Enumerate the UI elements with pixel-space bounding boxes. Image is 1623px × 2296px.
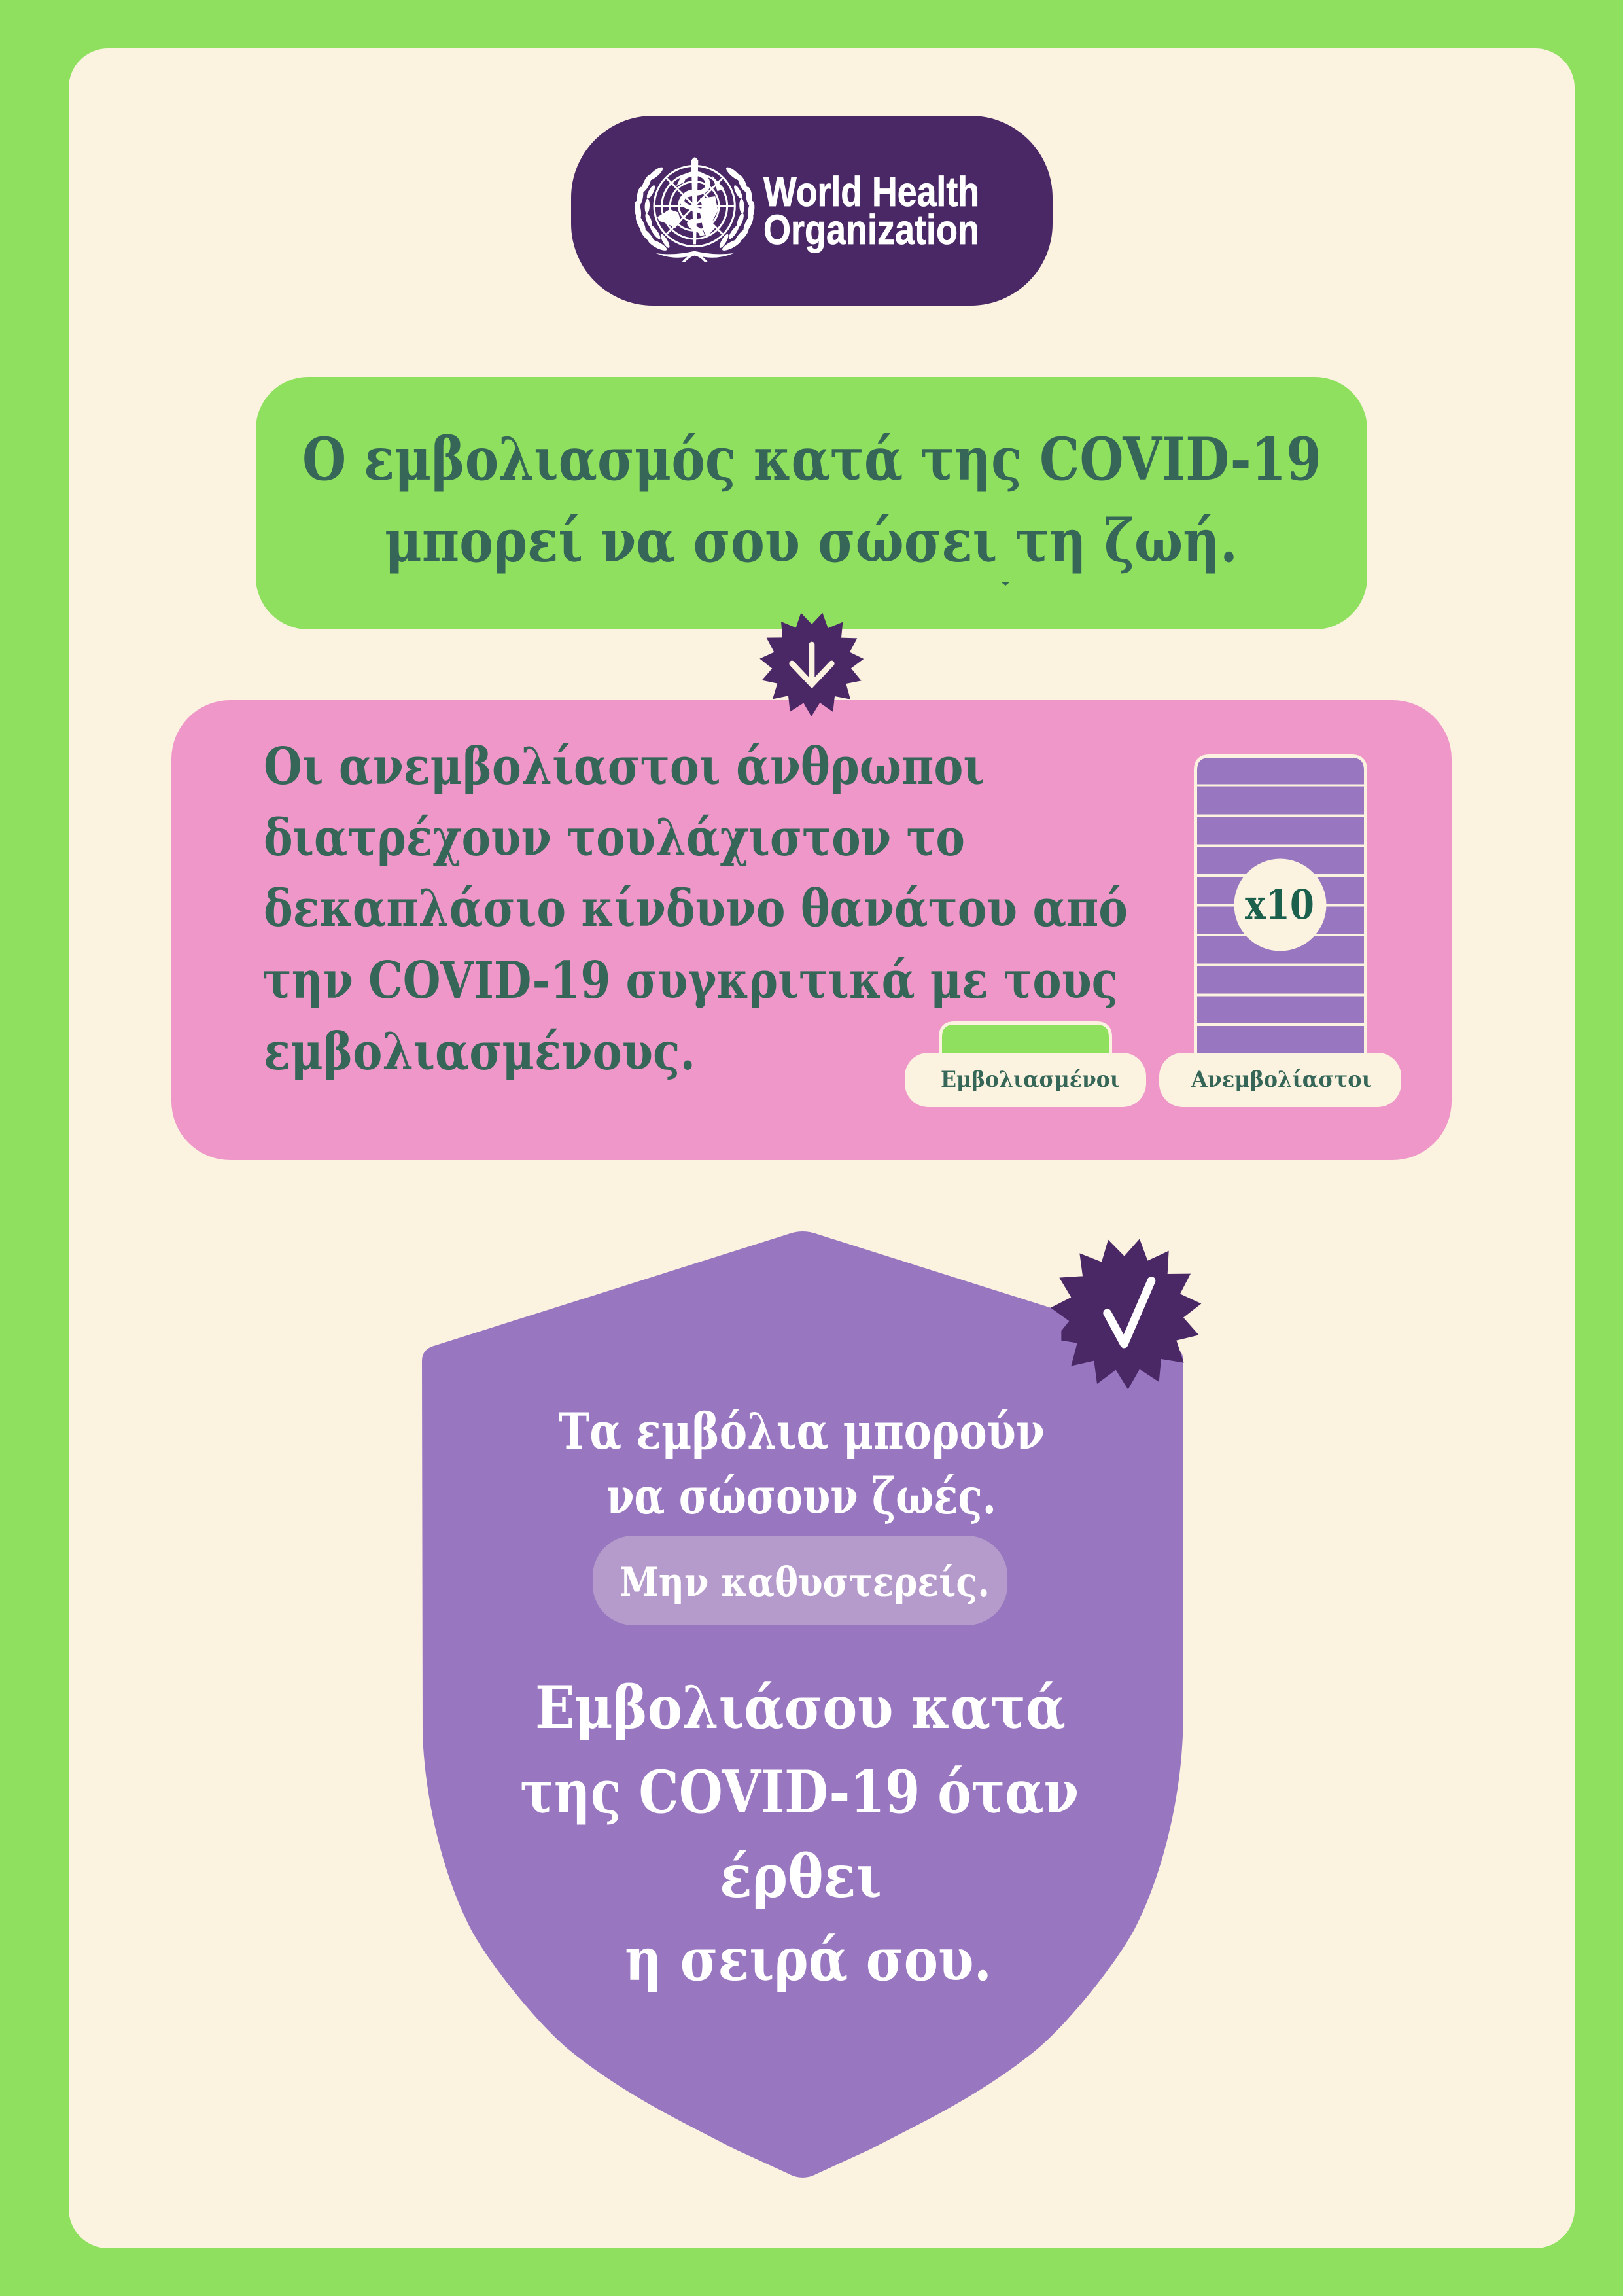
risk text: εμβολιασμένους. bbox=[264, 1022, 695, 1082]
label: unvaccinated: Ανεμβολίαστοι bbox=[1191, 1067, 1372, 1093]
text: vaccines save lives: να σώσουν ζωές. bbox=[606, 1467, 996, 1525]
text: get vaccinated bbox=[520, 1673, 1079, 1994]
icon: down arrow badge bbox=[759, 613, 864, 716]
risk text: Οι ανεμβολίαστοι άνθρωποι bbox=[264, 737, 985, 796]
panel: pink risk comparison bbox=[171, 700, 1452, 1160]
panel: green headline bbox=[256, 377, 1367, 629]
callout: do not delay bbox=[593, 1536, 1007, 1625]
risk text: διατρέχουν τουλάχιστον το bbox=[264, 808, 965, 868]
text: get vaccinated: έρθει bbox=[720, 1842, 882, 1911]
x10 badge: x10 bbox=[1245, 881, 1314, 928]
logo wordmark: World Health bbox=[763, 168, 979, 215]
WHO logo pill bbox=[571, 116, 1053, 306]
icon: WHO emblem bbox=[633, 157, 756, 262]
callout: do not delay: Μην καθυστερείς. bbox=[620, 1559, 990, 1606]
bar: unvaccinated x10 bbox=[1195, 756, 1366, 1060]
bar: vaccinated bbox=[941, 1023, 1111, 1060]
risk text bbox=[262, 737, 1128, 1082]
panel: shield call to action bbox=[422, 1231, 1183, 2178]
label: unvaccinated bbox=[1159, 1053, 1401, 1107]
text: get vaccinated: η σειρά σου. bbox=[625, 1925, 992, 1994]
text: vaccines save lives bbox=[559, 1402, 1045, 1525]
risk text: δεκαπλάσιο κίνδυνο θανάτου από bbox=[264, 879, 1128, 938]
logo wordmark: Organization bbox=[763, 206, 979, 253]
x10 badge bbox=[1234, 858, 1327, 951]
logo wordmark bbox=[763, 168, 979, 253]
risk text: την COVID-19 συγκριτικά με τους bbox=[262, 951, 1118, 1010]
text: get vaccinated: της COVID-19 όταν bbox=[520, 1757, 1079, 1827]
label: vaccinated: Εμβολιασμένοι bbox=[941, 1067, 1120, 1093]
heading text: μπορεί να σου σώσει τη ζωή. bbox=[385, 506, 1238, 576]
icon: check mark badge bbox=[1051, 1239, 1201, 1390]
label: vaccinated bbox=[905, 1053, 1146, 1107]
text: get vaccinated: Εμβολιάσου κατά bbox=[535, 1673, 1066, 1742]
heading text: Ο εμβολιασμός κατά της COVID-19 bbox=[302, 425, 1321, 494]
text: vaccines save lives: Τα εμβόλια μπορούν bbox=[559, 1402, 1045, 1460]
heading text bbox=[302, 425, 1321, 586]
